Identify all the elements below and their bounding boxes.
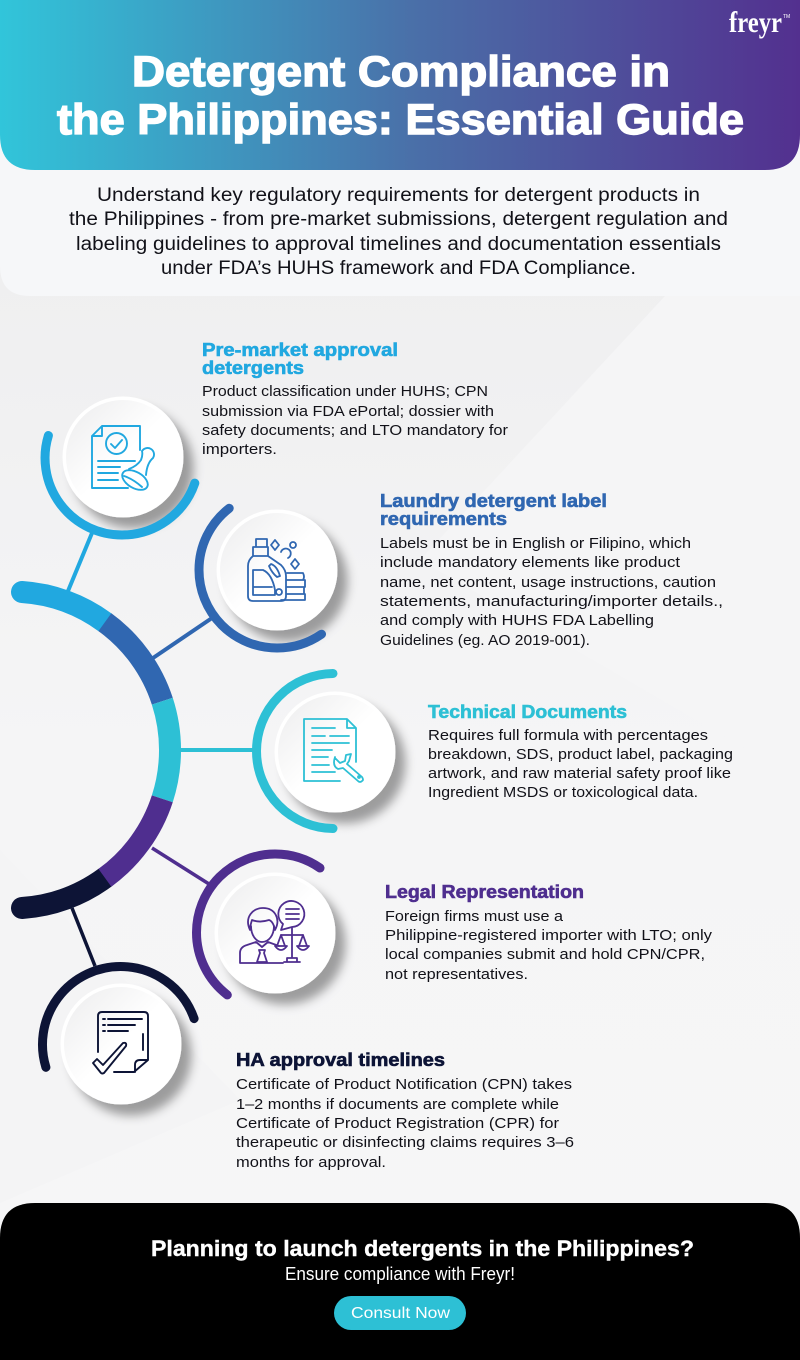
- intro text: the Philippines - from pre-market submissions, detergent regulation and: [69, 209, 728, 230]
- main segmented arc: [22, 592, 170, 908]
- icon: lawyer with scales: [240, 901, 309, 963]
- ring 5: [42, 966, 194, 1067]
- title: Detergent Compliance in: [132, 48, 670, 96]
- body 5: Certificate of Product Registration (CPR) for: [236, 1115, 559, 1132]
- body 4: Philippine-registered importer with LTO; only: [385, 927, 713, 944]
- heading 1: [202, 340, 398, 378]
- button: consult now: Consult Now: [351, 1305, 450, 1322]
- footer call to action: [0, 1203, 800, 1360]
- heading 4: Legal Representation: [385, 882, 584, 902]
- circle 5: [60, 984, 182, 1104]
- button: consult now: [334, 1296, 466, 1330]
- body 3: [428, 727, 733, 801]
- body 5: [236, 1076, 574, 1171]
- title: the Philippines: Essential Guide: [57, 96, 744, 144]
- ring 3: [256, 674, 333, 828]
- footer headline: Planning to launch detergents in the Philippines?: [151, 1236, 694, 1261]
- circle 2: [216, 510, 338, 630]
- step 2: label requirements: [153, 491, 723, 658]
- body 4: local companies submit and hold CPN/CPR,: [385, 946, 705, 963]
- connector 2: [153, 618, 212, 658]
- logo: freyr: TM: [783, 14, 790, 20]
- icon: document with wrench: [304, 719, 363, 782]
- body 2: include mandatory elements like product: [380, 554, 681, 571]
- body 2: statements, manufacturing/importer details.,: [380, 593, 723, 610]
- logo: freyr: freyr: [729, 6, 782, 39]
- step 3: technical documents: [180, 674, 733, 828]
- body 4: [385, 908, 713, 983]
- body 2: Labels must be in English or Filipino, which: [380, 535, 691, 552]
- footer subline: Ensure compliance with Freyr!: [285, 1264, 515, 1284]
- body 3: breakdown, SDS, product label, packaging: [428, 746, 733, 763]
- title: [57, 48, 744, 144]
- icon: detergent bottle: [248, 539, 305, 601]
- body 3: Ingredient MSDS or toxicological data.: [428, 784, 698, 801]
- body 2: [380, 535, 723, 649]
- body 1: importers.: [202, 441, 277, 458]
- circle 1: [62, 396, 184, 518]
- intro text: [69, 185, 728, 279]
- circle 4: [214, 872, 336, 994]
- step 1: pre-market approval: [45, 340, 508, 591]
- connector 4: [152, 848, 209, 884]
- icon: note with check: [93, 1012, 148, 1074]
- heading 3: Technical Documents: [428, 702, 627, 722]
- body 3: Requires full formula with percentages: [428, 727, 708, 744]
- connector 3: [180, 748, 256, 752]
- intro text: labeling guidelines to approval timelines and documentation essentials: [76, 234, 721, 255]
- body 5: 1–2 months if documents are complete while: [236, 1096, 559, 1113]
- body 2: Guidelines (eg. AO 2019-001).: [380, 632, 590, 649]
- body 1: safety documents; and LTO mandatory for: [202, 422, 508, 439]
- body 2: name, net content, usage instructions, caution: [380, 574, 716, 591]
- heading 1: detergents: [202, 358, 304, 378]
- circle 3: [274, 692, 396, 812]
- ring 2: [199, 508, 322, 648]
- body 1: [202, 383, 508, 458]
- step 5: approval timelines: [42, 908, 574, 1171]
- heading 1: Pre-market approval: [202, 340, 398, 360]
- intro text: under FDA’s HUHS framework and FDA Compliance.: [161, 258, 636, 279]
- body 4: Foreign firms must use a: [385, 908, 564, 925]
- heading 2: Laundry detergent label: [380, 491, 607, 511]
- body 1: Product classification under HUHS; CPN: [202, 383, 488, 400]
- intro text: Understand key regulatory requirements for detergent products in: [97, 185, 700, 206]
- ring 4: [196, 854, 320, 995]
- connector 1: [68, 533, 92, 591]
- icon: document with stamp: [92, 426, 154, 494]
- body 2: and comply with HUHS FDA Labelling: [380, 612, 654, 629]
- connector 5: [72, 908, 95, 966]
- ring 1: [45, 436, 195, 535]
- header banner: [0, 0, 800, 170]
- body 5: therapeutic or disinfecting claims requires 3–6: [236, 1134, 574, 1151]
- body 1: submission via FDA ePortal; dossier with: [202, 403, 494, 420]
- heading 5: HA approval timelines: [236, 1050, 445, 1070]
- heading 2: requirements: [380, 509, 507, 529]
- heading 2: [380, 491, 607, 529]
- body 5: Certificate of Product Notification (CPN) takes: [236, 1076, 572, 1093]
- intro panel: [0, 120, 800, 296]
- body 4: not representatives.: [385, 966, 528, 983]
- step 4: legal representation: [152, 848, 713, 995]
- body 3: artwork, and raw material safety proof like: [428, 765, 731, 782]
- body 5: months for approval.: [236, 1154, 386, 1171]
